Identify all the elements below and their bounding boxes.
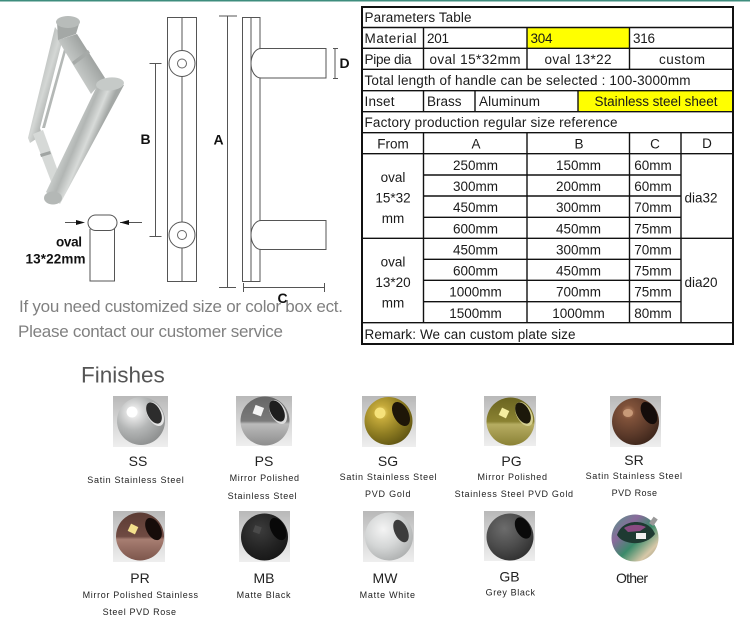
finish: SG: Satin Stainless Steel [340, 472, 437, 482]
size rows: oval 15*32: 600mm [453, 222, 498, 236]
finish: PG: Mirror Polished [478, 472, 548, 482]
finish: SG: SG [378, 453, 398, 469]
finish: GB [484, 511, 536, 598]
finish: PS: Mirror Polished [230, 473, 300, 483]
dimension B: B [140, 131, 151, 147]
size rows: oval 15*32: 60mm [634, 158, 672, 173]
finish: Other: Other [616, 570, 648, 586]
finish: MB: MB [254, 570, 274, 586]
finish: Other [612, 514, 658, 586]
remark row: Remark: We can custom plate size [364, 327, 576, 342]
finish: SR: SR [624, 452, 644, 468]
finish: PR: Steel PVD Rose [103, 607, 177, 617]
size rows: oval 13*20: 80mm [634, 306, 672, 321]
dimension C [244, 283, 324, 306]
table header and option rows: Brass [427, 94, 462, 109]
table header and option rows: 201 [427, 31, 449, 46]
dimension D [333, 48, 350, 78]
table header and option rows: Aluminum [479, 94, 540, 109]
size rows: oval 15*32: 300mm [453, 179, 498, 194]
finish: SG: PVD Gold [365, 489, 411, 499]
table header and option rows: Material [364, 31, 416, 46]
finish: SR: PVD Rose [612, 488, 658, 498]
size rows: oval 15*32: 450mm [453, 200, 498, 215]
size rows: oval 15*32: 70mm [634, 200, 672, 215]
finish: GB: GB [499, 568, 520, 584]
yellow highlight cells [527, 28, 733, 112]
size rows: oval 15*32: 200mm [556, 179, 601, 194]
finish: PR [83, 511, 199, 617]
table header and option rows: Pipe dia [364, 52, 412, 67]
finish: PR: PR [130, 570, 150, 586]
finish: PG [455, 396, 574, 499]
finish: SS [87, 396, 184, 485]
finish: SG [340, 396, 437, 499]
size rows: oval 15*32 [375, 158, 718, 236]
dimension B [140, 64, 162, 236]
customer service note: If you need customized size or color box ect. [19, 297, 343, 316]
table header and option rows [364, 10, 718, 130]
finish: SR [586, 396, 683, 498]
size reference header: A [471, 136, 481, 152]
size rows: oval 13*20: mm [382, 296, 404, 310]
finish: MW: Matte White [360, 590, 416, 600]
table header and option rows: Factory production regular size reference [364, 115, 618, 130]
finish: PS [228, 396, 300, 501]
table header and option rows: 316 [633, 31, 655, 46]
table header and option rows: custom [659, 52, 705, 67]
finish: MW: MW [373, 570, 398, 586]
finish: MB [237, 511, 291, 600]
size rows: oval 13*20: 75mm [634, 264, 672, 278]
size rows: oval 13*20: 13*20 [375, 275, 411, 290]
size rows: oval 15*32: 250mm [453, 158, 498, 173]
table header and option rows: oval 13*22 [544, 52, 612, 67]
size rows: oval 13*20: 600mm [453, 264, 498, 278]
finish: PS: Stainless Steel [228, 491, 297, 501]
label: oval size: 13*22mm [26, 252, 86, 266]
oval section diagram [56, 215, 142, 281]
finish: SR: Satin Stainless Steel [586, 471, 683, 481]
dimension A [213, 16, 237, 288]
finish: PG: Stainless Steel PVD Gold [455, 489, 574, 499]
size rows: oval 13*20: 300mm [556, 242, 601, 258]
dimension D: D [339, 55, 350, 71]
size rows: oval 15*32: mm [382, 211, 404, 226]
finish: GB: Grey Black [486, 588, 536, 598]
size reference header: C [650, 136, 660, 152]
size rows: oval 15*32: dia32 [684, 190, 718, 206]
size rows: oval 15*32: 75mm [634, 222, 672, 236]
size rows: oval 15*32: oval [381, 170, 405, 185]
table header and option rows: Total length of handle can be selected : 100-3000mm [364, 73, 690, 88]
finishes heading: Finishes [81, 362, 165, 388]
finish: MB: Matte Black [237, 590, 291, 600]
size reference header: D [702, 136, 712, 151]
finish: MW [360, 511, 416, 600]
size rows: oval 13*20: 70mm [634, 242, 672, 258]
size rows: oval 13*20: dia20 [684, 275, 718, 290]
dimension C: C [277, 290, 288, 306]
table header and option rows: Inset [364, 94, 395, 109]
size reference header: B [574, 136, 584, 152]
size rows: oval 13*20: 1500mm [449, 306, 502, 321]
finish: PG: PG [501, 453, 522, 469]
size reference header: From [377, 136, 409, 152]
table header and option rows: oval 15*32mm [430, 52, 520, 67]
size rows: oval 13*20: oval [381, 254, 405, 270]
size rows: oval 13*20: 450mm [453, 242, 498, 258]
size rows: oval 13*20: 1000mm [552, 306, 605, 321]
side view drawing [242, 18, 326, 282]
size rows: oval 13*20: 1000mm [449, 284, 502, 300]
size rows: oval 13*20: 450mm [556, 264, 601, 278]
finish: SS: SS [129, 453, 147, 469]
product photo: door handle [28, 16, 125, 204]
finish: PR: Mirror Polished Stainless [83, 590, 199, 600]
parameters table [362, 7, 733, 344]
label: oval: oval [56, 234, 82, 250]
top border strip [0, 0, 750, 2]
table header and option rows: Stainless steel sheet [594, 94, 718, 109]
front view drawing [168, 18, 196, 282]
size rows: oval 13*20: 75mm [634, 284, 672, 300]
size rows: oval 15*32: 150mm [556, 158, 601, 173]
customer service note: Please contact our customer service [18, 322, 283, 341]
size reference header [377, 136, 712, 152]
table header and option rows: 304 [530, 31, 553, 46]
size rows: oval 15*32: 60mm [634, 179, 672, 194]
size rows: oval 15*32: 15*32 [375, 190, 411, 206]
size rows: oval 15*32: 450mm [556, 222, 601, 236]
dimension A: A [213, 132, 224, 148]
size rows: oval 13*20 [375, 242, 718, 321]
customer service note [18, 297, 343, 341]
finish: SS: Satin Stainless Steel [87, 475, 184, 485]
finish: PS: PS [255, 453, 273, 469]
table header and option rows: Parameters Table [364, 10, 472, 25]
size rows: oval 15*32: 300mm [556, 200, 601, 215]
size rows: oval 13*20: 700mm [556, 284, 601, 300]
